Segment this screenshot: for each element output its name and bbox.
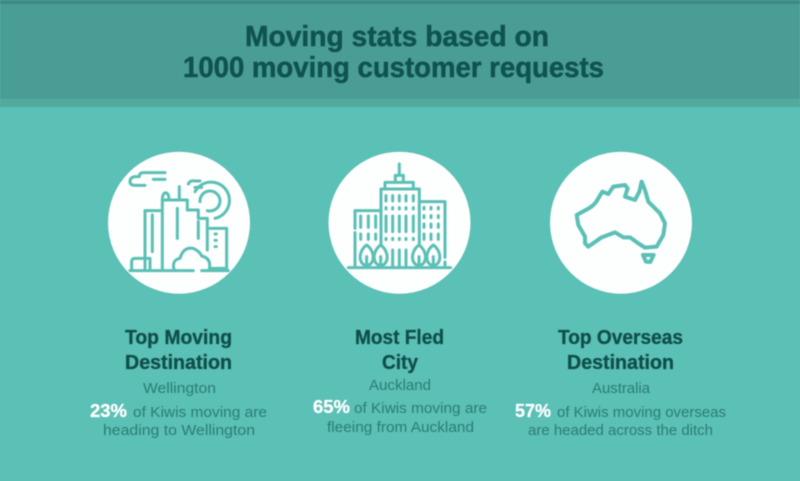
heading: top overseas destination — [558, 327, 683, 374]
heading: most fled city: Most Fled — [355, 327, 444, 349]
text: Wellington stat — [90, 380, 267, 439]
icon: city skyline with sun and clouds — [108, 152, 250, 294]
text: Auckland stat: Auckland — [369, 377, 431, 394]
heading: top moving destination: Destination — [125, 352, 232, 374]
text: Auckland stat — [313, 377, 487, 436]
heading: most fled city: City — [382, 352, 419, 374]
title — [183, 21, 604, 84]
panel: top moving destination — [90, 152, 267, 439]
text: Auckland stat: fleeing from Auckland — [327, 419, 474, 436]
header band — [0, 0, 800, 107]
text: Wellington stat: of Kiwis moving are — [133, 404, 267, 421]
text: Auckland stat: 65% — [313, 397, 350, 417]
text: Australia stat — [515, 380, 726, 439]
text: Wellington stat: heading to Wellington — [103, 422, 255, 439]
icon: map of Australia — [550, 152, 692, 294]
heading: top moving destination: Top Moving — [125, 327, 232, 349]
icon: office towers with trees — [328, 152, 470, 294]
heading: top moving destination — [125, 327, 232, 374]
title: 1000 moving customer requests — [183, 52, 604, 84]
heading: top overseas destination: Top Overseas — [558, 327, 683, 349]
title: Moving stats based on — [245, 21, 549, 53]
text: Australia stat: Australia — [592, 380, 651, 397]
text: Australia stat: are headed across the ditch — [528, 422, 713, 439]
text: Wellington stat: 23% — [90, 401, 127, 421]
heading: most fled city — [355, 327, 444, 374]
text: Auckland stat: of Kiwis moving are — [354, 400, 487, 417]
panel: most fled city — [313, 152, 487, 436]
heading: top overseas destination: Destination — [567, 352, 674, 374]
panel: top overseas destination — [515, 152, 726, 439]
text: Wellington stat: Wellington — [143, 380, 216, 397]
text: Australia stat: of Kiwis moving overseas — [557, 404, 726, 421]
text: Australia stat: 57% — [515, 401, 551, 421]
